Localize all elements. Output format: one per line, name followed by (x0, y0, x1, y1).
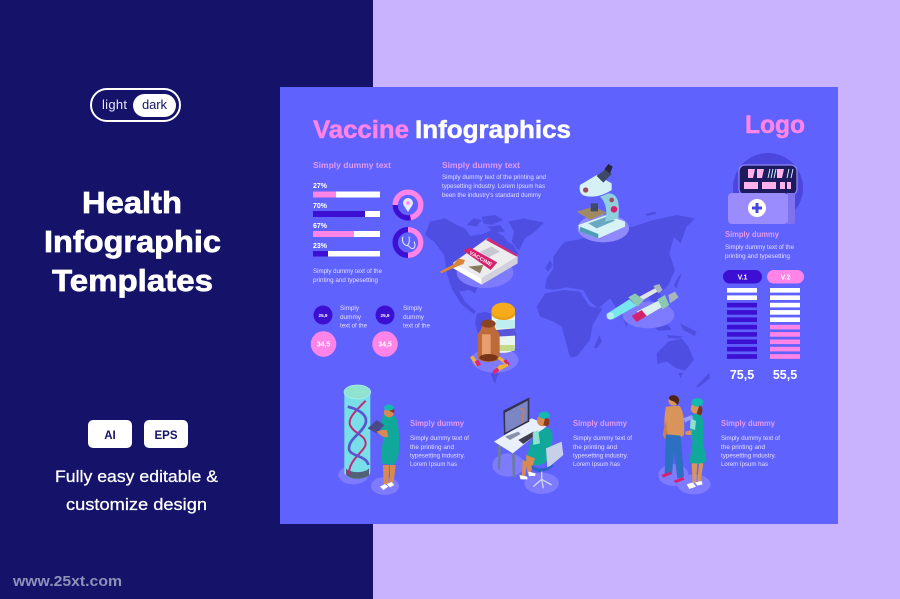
title: Infographics (415, 116, 571, 144)
text block: DNA: Simply dummy text of (410, 436, 469, 442)
title (313, 116, 571, 144)
watermark: www.25xt.com (12, 574, 122, 590)
icon: vaccine box (440, 238, 518, 288)
text block: intro (442, 161, 546, 199)
text block: bars note: printing and typesetting (313, 278, 378, 284)
text block: vaccination: the printing and (721, 445, 765, 451)
chart: V.2: V.2 (781, 274, 791, 282)
icon: vaccine box: VACCINE (468, 250, 494, 268)
panel: infographic card (280, 87, 838, 524)
text block: computer: Simply dummy text of (573, 436, 632, 442)
text block: vaccination (721, 419, 780, 468)
text block: bars note: Simply dummy text of the (313, 269, 383, 275)
text block: kit: Simply dummy (725, 230, 780, 239)
icon: medicine bottles (470, 303, 518, 374)
badge: AI: AI (104, 430, 116, 442)
chart: V.1 (723, 270, 762, 382)
panel: navy sidebar (0, 0, 373, 599)
text block: computer: typesetting industry. (573, 454, 628, 460)
text block: computer (573, 419, 632, 468)
stat: first pair: dummy (340, 315, 361, 321)
icon: medical kit (728, 153, 803, 224)
toggle: light dark (91, 89, 180, 121)
stat: second pair (372, 306, 431, 357)
stat: first pair: 25,9 (319, 313, 328, 318)
heading: Health Infographic Templates: Health (82, 185, 182, 220)
toggle: light dark: dark (142, 97, 168, 112)
text block: computer: the printing and (573, 445, 617, 451)
text block: intro: typesetting industry. Lorem Ipsum has (442, 184, 545, 190)
stat: first pair: text of the (340, 324, 368, 330)
chart: V.2 (767, 270, 804, 382)
stat: first pair: Simply (340, 306, 359, 312)
stat: first pair: 34,5 (317, 342, 330, 348)
stat: second pair: 34,5 (378, 342, 392, 348)
title: Vaccine (313, 116, 409, 144)
illustration: nurse vaccinating patient (658, 395, 711, 494)
bar chart: percentages: 70% (313, 203, 328, 210)
stat: second pair: text of the (403, 324, 431, 330)
bar chart: percentages: 27% (313, 183, 328, 190)
illustration: DNA tube and nurse (338, 385, 399, 495)
badge: AI (88, 420, 132, 448)
icon: microscope (577, 164, 629, 242)
text block: vaccination: typesetting industry. (721, 454, 776, 460)
heading: Health Infographic Templates: Infographic (44, 224, 221, 259)
bar chart: percentages (313, 183, 380, 256)
illustration: doctor at computer (492, 397, 563, 494)
icon: syringes (606, 284, 679, 328)
text block: vaccination: Simply dummy (721, 419, 776, 428)
badge: EPS (144, 420, 188, 448)
badge: EPS: EPS (154, 430, 178, 442)
tagline (55, 467, 219, 514)
stat: first pair (311, 306, 368, 357)
world map (425, 211, 710, 387)
logo: Logo (745, 111, 805, 139)
stat: second pair: dummy (403, 315, 424, 321)
chart: V.1: 75,5 (730, 368, 754, 382)
text block: DNA: Simply dummy (410, 419, 465, 428)
text block: bars heading: Simply dummy text (313, 161, 391, 170)
text block: bars note (313, 269, 383, 284)
text block: kit: printing and typesetting (725, 254, 790, 260)
text block: vaccination: Simply dummy text of (721, 436, 780, 442)
text block: DNA (410, 419, 469, 468)
heading: Health Infographic Templates (44, 185, 221, 298)
chart: V.2: 55,5 (773, 368, 797, 382)
donut: stethoscope (395, 230, 421, 255)
tagline: Fully easy editable & (55, 467, 219, 486)
bar chart: percentages: 23% (313, 243, 328, 250)
stat: second pair: Simply (403, 306, 422, 312)
toggle: light dark: light (102, 97, 127, 112)
text block: intro: been the industry's standard dummy (442, 193, 541, 199)
chart: V.1: V.1 (738, 274, 748, 282)
text block: intro: Simply dummy text (442, 161, 520, 170)
text block: kit: Simply dummy text of the (725, 245, 795, 251)
text block: DNA: typesetting industry. (410, 454, 465, 460)
heading: Health Infographic Templates: Templates (52, 263, 213, 298)
stat: second pair: 25,9 (381, 313, 390, 318)
donut: location (395, 192, 421, 218)
text block: DNA: Lorem Ipsum has (410, 462, 457, 468)
text block: computer: Lorem Ipsum has (573, 462, 620, 468)
text block: vaccination: Lorem Ipsum has (721, 462, 768, 468)
text block: intro: Simply dummy text of the printing and (442, 175, 546, 181)
text block: kit (725, 230, 795, 260)
text block: computer: Simply dummy (573, 419, 628, 428)
tagline: customize design (66, 495, 207, 514)
text block: DNA: the printing and (410, 445, 454, 451)
bar chart: percentages: 67% (313, 223, 328, 230)
